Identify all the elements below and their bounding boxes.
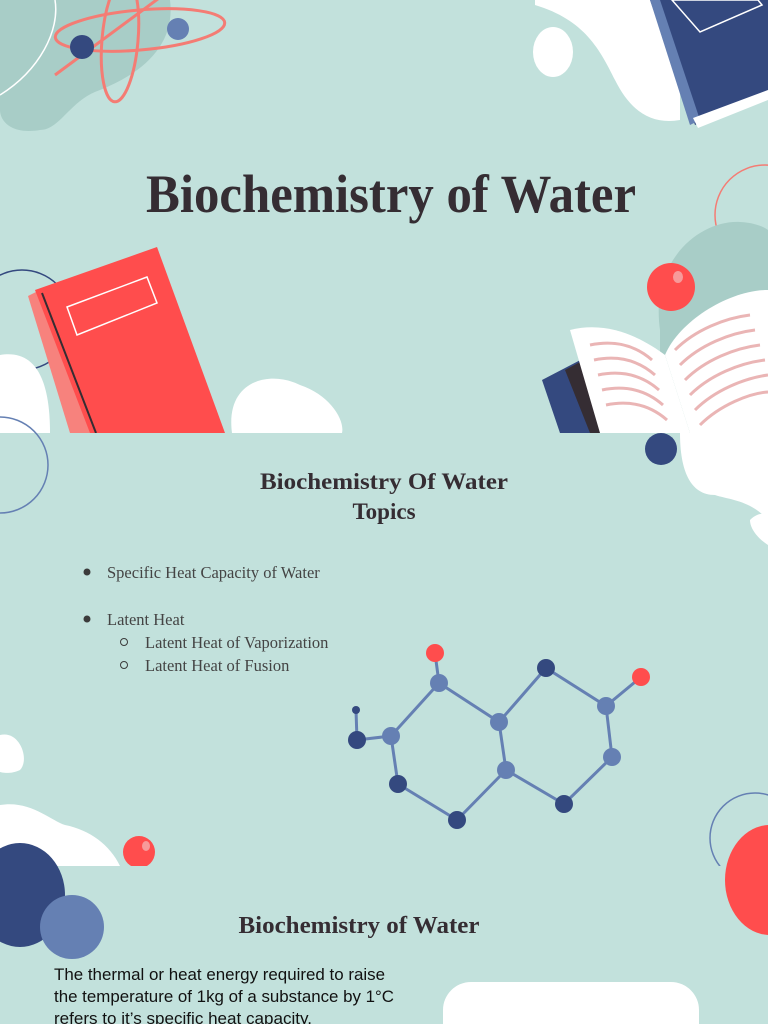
icon: open book xyxy=(542,290,768,433)
icon: atom xyxy=(54,0,226,103)
white blob top-right xyxy=(535,0,680,121)
bullet list: Latent Heat of Fusion xyxy=(145,656,289,675)
icon: red ball xyxy=(647,263,695,311)
text block: definition: the temperature of 1kg of a substance by 1°C xyxy=(54,987,394,1006)
icon: red book xyxy=(28,247,225,433)
white card xyxy=(443,982,699,1024)
bullet list: Latent Heat xyxy=(107,610,185,629)
right decorations xyxy=(715,165,768,265)
heading: topics: Biochemistry Of Water xyxy=(260,469,508,494)
bullet list: Latent Heat of Vaporization xyxy=(145,633,328,652)
text block: definition: The thermal or heat energy required to raise xyxy=(54,965,385,984)
heading: topics xyxy=(260,469,508,524)
slide 2 xyxy=(0,417,768,883)
left decorations xyxy=(0,270,72,370)
heading: slide 3: Biochemistry of Water xyxy=(238,913,480,939)
bullet list: Specific Heat Capacity of Water xyxy=(107,563,320,582)
bullet list xyxy=(84,563,328,675)
slide 1 xyxy=(0,0,768,433)
slide 3 xyxy=(0,825,768,1024)
icon: blue book top-right xyxy=(650,0,768,128)
molecule diagram xyxy=(348,644,650,829)
title: Biochemistry of Water xyxy=(146,164,636,224)
blob top-left xyxy=(0,0,171,131)
text block: definition xyxy=(54,965,394,1024)
heading: topics: Topics xyxy=(352,499,416,524)
